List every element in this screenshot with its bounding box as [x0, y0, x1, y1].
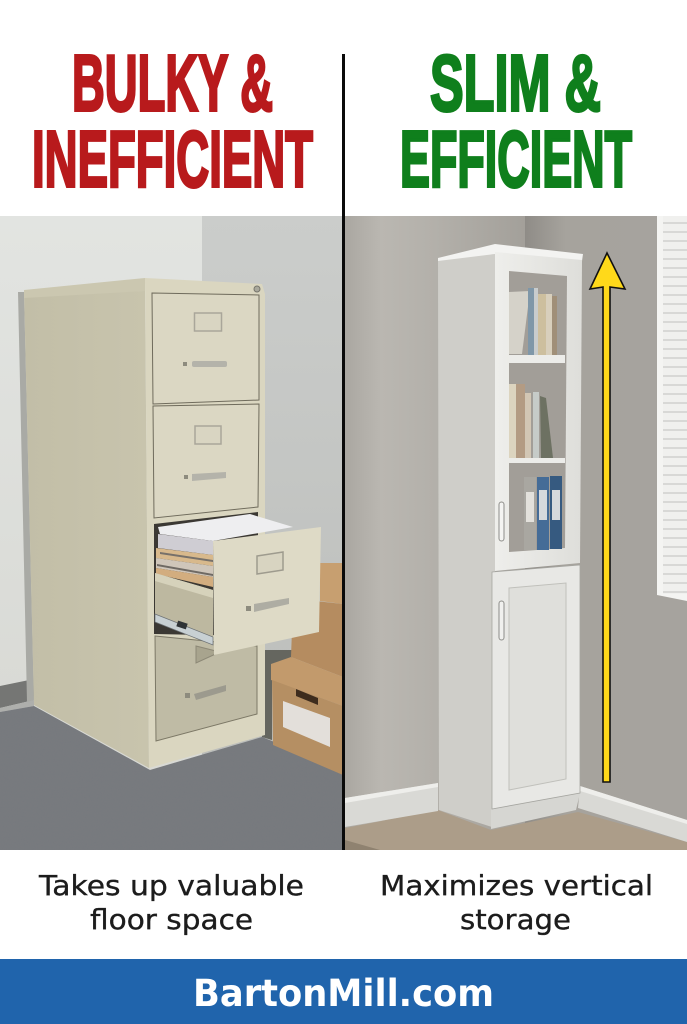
heading: bulky and inefficient [32, 38, 313, 204]
caption: maximizes vertical storage: Maximizes vertical [380, 869, 653, 902]
open drawer interior [154, 512, 258, 636]
shelf 2 [509, 458, 565, 463]
footer banner [0, 959, 687, 1024]
open drawer side and rail [155, 573, 213, 645]
panel: slim cabinet photo [345, 216, 687, 850]
filing cabinet [24, 278, 265, 768]
caption: takes up floor space: floor space [90, 903, 253, 936]
caption: takes up floor space [38, 869, 304, 936]
glass door handle [499, 502, 504, 541]
slim storage cabinet [438, 244, 583, 829]
drawer 4 [155, 636, 257, 741]
drawer 2 [153, 404, 259, 518]
panel: filing cabinet photo [0, 216, 343, 850]
heading: slim and efficient [400, 38, 632, 204]
cabinet shadow on wall [18, 292, 34, 702]
window with blinds [657, 216, 687, 601]
floor [345, 810, 687, 850]
baseboard left [345, 783, 438, 827]
lower door [492, 565, 580, 809]
upper glass door [495, 252, 582, 571]
shelf books top [509, 288, 557, 355]
open drawer front [213, 527, 321, 655]
shadow behind boxes [262, 650, 292, 740]
drawer 1 [152, 293, 259, 404]
cardboard boxes [271, 563, 343, 775]
heading: bulky and inefficient: INEFFICIENT [32, 114, 313, 204]
paper stack [156, 514, 293, 587]
footer banner: BartonMill.com [193, 972, 494, 1015]
baseboard [0, 679, 34, 708]
center divider [342, 54, 345, 850]
shelf books middle [509, 384, 553, 458]
icon: upward arrow [590, 253, 625, 782]
shelf 1 [509, 355, 565, 363]
caption: maximizes vertical storage [380, 869, 653, 936]
heading: bulky and inefficient: BULKY & [72, 38, 273, 128]
baseboard right [578, 786, 687, 842]
carpet floor [0, 706, 343, 850]
binders [524, 476, 562, 550]
caption: takes up floor space: Takes up valuable [38, 869, 304, 902]
caption: maximizes vertical storage: storage [460, 903, 571, 936]
